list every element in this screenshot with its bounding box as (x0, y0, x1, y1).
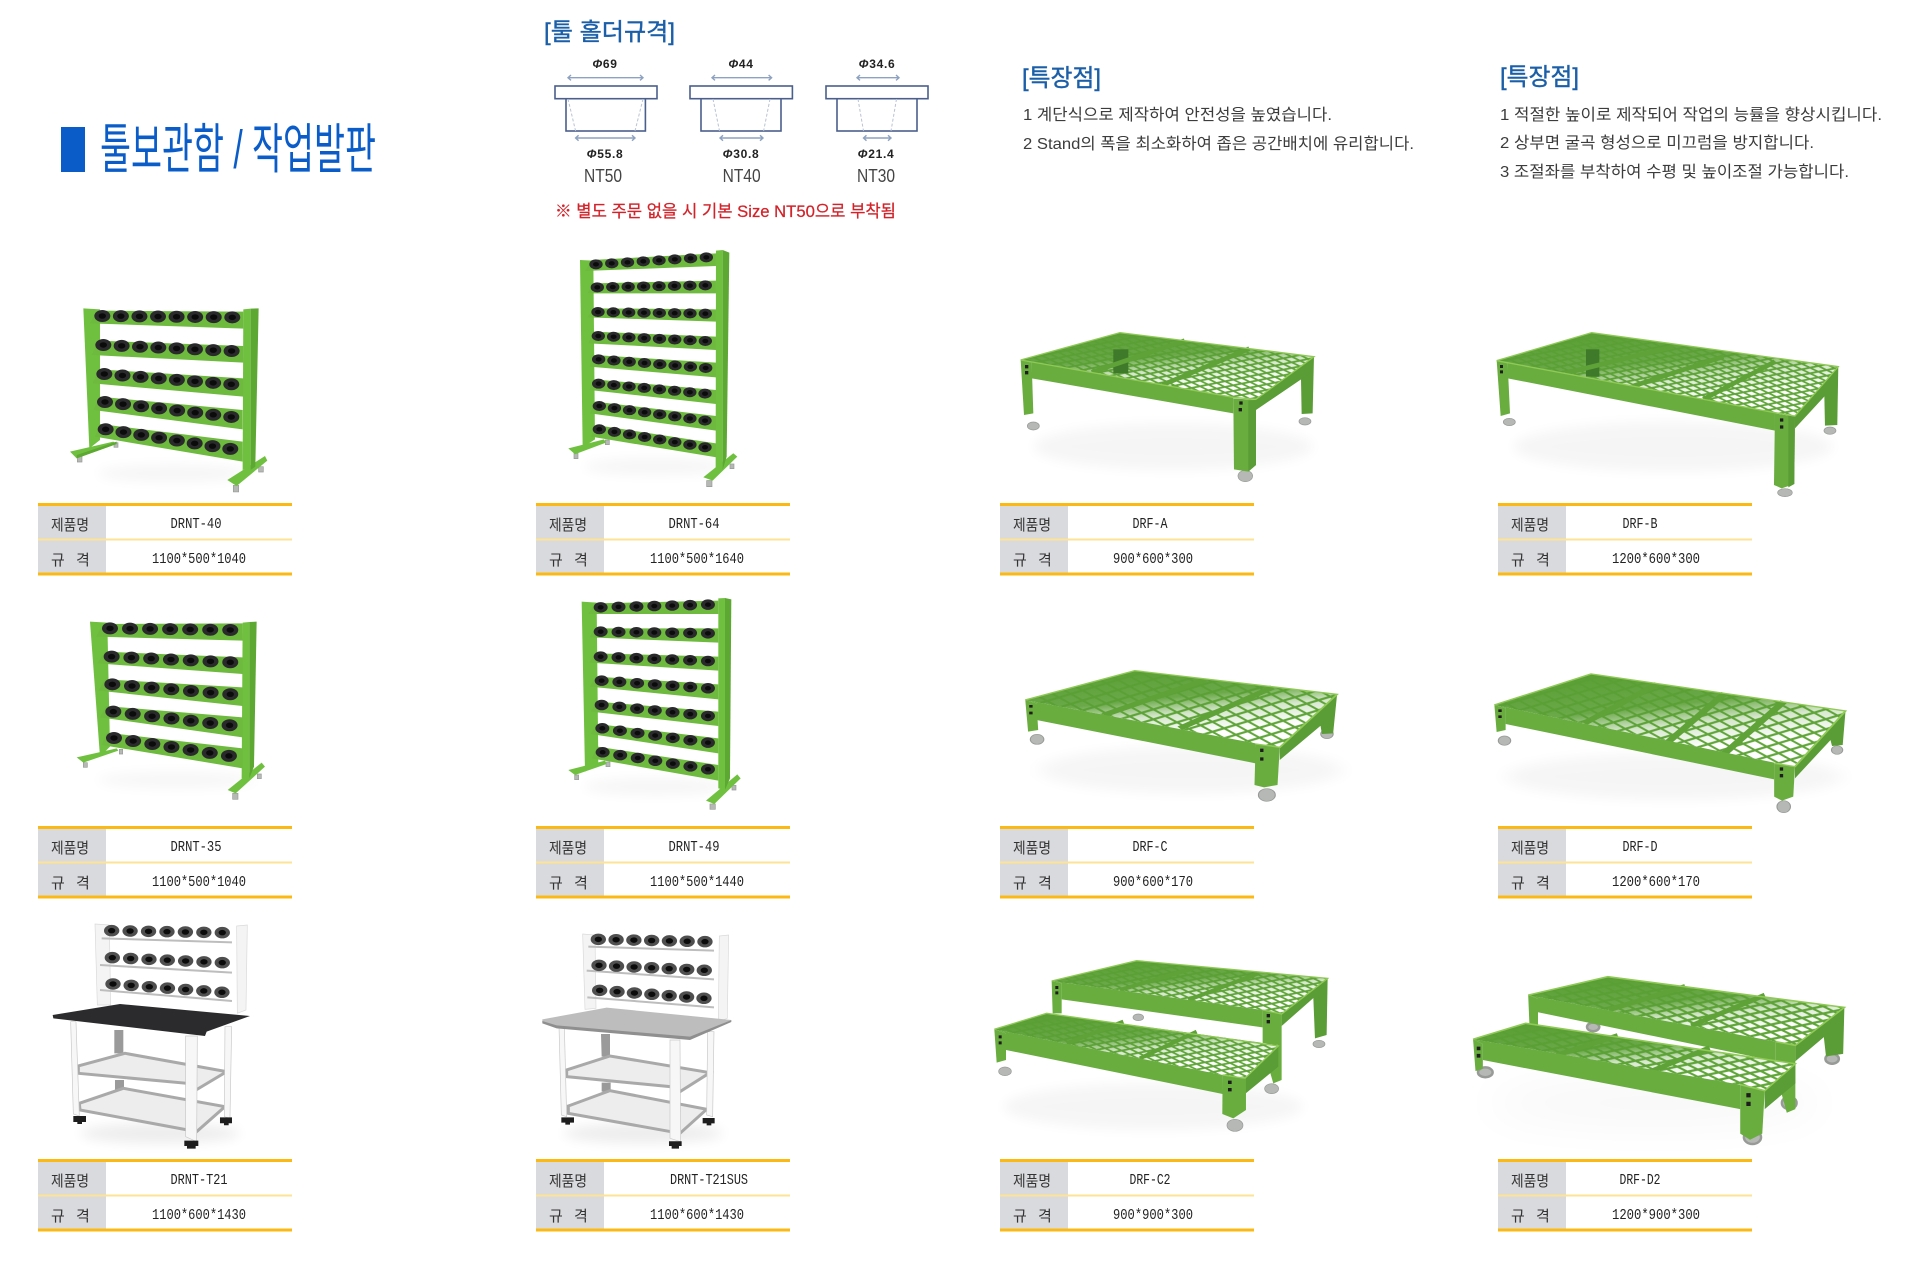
product: DRF-A platform (1021, 333, 1314, 482)
product: DRF-D2 two-step platform (1473, 977, 1844, 1144)
product: DRF-C platform (1025, 671, 1343, 801)
heading: features: [특장점] (1500, 64, 1579, 91)
spec table: DRF-C2: DRF-C2 (1130, 1173, 1170, 1189)
spec table: DRF-D2: 1200*900*300 (1612, 1208, 1700, 1224)
spec table: DRNT-T21SUS (536, 1159, 790, 1232)
spec table: DRF-D2: DRF-D2 (1620, 1173, 1660, 1189)
spec table: DRNT-49 (536, 826, 790, 898)
heading: features: [특장점] (1022, 65, 1101, 92)
spec table: DRNT-49: 제품명 (549, 840, 587, 857)
spec table: DRNT-40: 제품명 (51, 517, 89, 534)
spec table: DRNT-40: DRNT-40 (170, 517, 222, 533)
spec table: DRNT-T21: 격 (76, 1208, 90, 1225)
note: default size: ※ 별도 주문 없을 시 기본 Size NT50으로 부착됨 (555, 202, 896, 221)
spec table: DRNT-49: 격 (574, 875, 588, 892)
spec table: DRNT-64: 격 (574, 552, 588, 569)
spec table: DRF-C2 (1000, 1159, 1254, 1232)
diagram: NT30: NT30 (857, 166, 895, 186)
spec table: DRNT-T21SUS: 격 (574, 1208, 588, 1225)
diagram: NT40 (690, 57, 792, 186)
spec table: DRF-C2: 제품명 (1013, 1173, 1051, 1190)
spec table: DRF-D: 격 (1536, 875, 1550, 892)
feature list (1500, 106, 1882, 181)
diagram: NT30 (826, 57, 928, 186)
spec table: DRF-C: DRF-C (1132, 840, 1168, 856)
feature list: 1 계단식으로 제작하여 안전성을 높였습니다. (1023, 106, 1332, 124)
spec table: DRNT-35: 제품명 (51, 840, 89, 857)
feature list: 2 Stand의 폭을 최소화하여 좁은 공간배치에 유리합니다. (1023, 135, 1414, 153)
spec table: DRF-B: 1200*600*300 (1612, 552, 1700, 568)
spec table: DRF-B: 격 (1536, 552, 1550, 569)
product: DRNT-49 rack (568, 598, 741, 809)
diagram: NT40: Φ30.8 (723, 147, 759, 161)
spec table: DRNT-T21: 제품명 (51, 1173, 89, 1190)
panel: features right (1500, 64, 1882, 181)
spec table: DRF-A: 900*600*300 (1113, 552, 1193, 568)
spec table: DRF-A: 격 (1038, 552, 1052, 569)
spec table: DRF-C2: 900*900*300 (1113, 1208, 1193, 1224)
feature list: 2 상부면 굴곡 형성으로 미끄럼을 방지합니다. (1500, 134, 1814, 152)
spec table: DRNT-64: 규 (549, 552, 563, 569)
spec table: DRF-D: 제품명 (1511, 840, 1549, 857)
product: DRF-B platform (1497, 333, 1838, 497)
spec table: DRF-A (1000, 503, 1254, 576)
title (61, 120, 376, 180)
spec table: DRNT-35: DRNT-35 (170, 840, 222, 856)
diagram: NT50 (555, 57, 657, 186)
spec table: DRNT-35: 규 (51, 875, 65, 892)
product: DRF-D platform (1494, 674, 1846, 813)
spec table: DRNT-40: 규 (51, 552, 65, 569)
spec table: DRNT-35 (38, 826, 292, 898)
spec table: DRNT-T21SUS: DRNT-T21SUS (670, 1173, 748, 1189)
product: DRNT-64 rack (568, 250, 737, 487)
product: DRNT-35 rack (77, 622, 265, 799)
diagram: NT40: NT40 (723, 166, 761, 186)
feature list: 3 조절좌를 부착하여 수평 및 높이조절 가능합니다. (1500, 163, 1849, 181)
spec table: DRNT-35: 1100*500*1040 (152, 875, 246, 891)
spec table: DRNT-49: 규 (549, 875, 563, 892)
spec table: DRNT-49: 1100*500*1440 (650, 875, 744, 891)
spec table: DRNT-35: 격 (76, 875, 90, 892)
panel: features left (1022, 65, 1414, 153)
product: DRNT-T21SUS workbench (542, 934, 731, 1149)
icon: title square (61, 127, 85, 172)
spec table: DRF-D2: 제품명 (1511, 1173, 1549, 1190)
spec table: DRNT-T21SUS: 제품명 (549, 1173, 587, 1190)
heading: tool holder: [툴 홀더규격] (544, 19, 675, 46)
diagram: NT50: Φ55.8 (587, 147, 623, 161)
product: DRF-C2 two-step platform (994, 961, 1328, 1131)
spec table: DRF-C: 제품명 (1013, 840, 1051, 857)
diagram: NT50: Φ69 (592, 57, 618, 71)
spec table: DRF-B: 제품명 (1511, 517, 1549, 534)
spec table: DRF-A: 제품명 (1013, 517, 1051, 534)
spec table: DRF-B (1498, 503, 1752, 576)
spec table: DRNT-64: 1100*500*1640 (650, 552, 744, 568)
diagram: NT50: NT50 (584, 166, 622, 186)
feature list: 1 적절한 높이로 제작되어 작업의 능률을 향상시킵니다. (1500, 106, 1882, 124)
spec table: DRF-D2: 규 (1511, 1208, 1525, 1225)
spec table: DRNT-64: DRNT-64 (668, 517, 720, 533)
spec table: DRNT-T21: 규 (51, 1208, 65, 1225)
feature list (1023, 106, 1414, 153)
diagram: NT30: Φ21.4 (858, 147, 894, 161)
spec table: DRF-D2: 격 (1536, 1208, 1550, 1225)
spec table: DRNT-64 (536, 503, 790, 576)
spec table: DRF-D2 (1498, 1159, 1752, 1232)
product: DRNT-40 rack (70, 308, 267, 492)
spec table: DRNT-40: 격 (76, 552, 90, 569)
spec table: DRF-C (1000, 826, 1254, 898)
spec table: DRNT-49: DRNT-49 (668, 840, 720, 856)
spec table: DRNT-40: 1100*500*1040 (152, 552, 246, 568)
spec table: DRNT-T21: DRNT-T21 (170, 1173, 228, 1189)
spec table: DRF-D (1498, 826, 1752, 898)
spec table: DRF-B: DRF-B (1622, 517, 1658, 533)
diagram: NT30: Φ34.6 (859, 57, 895, 71)
spec table: DRF-C: 격 (1038, 875, 1052, 892)
spec table: DRF-D: 1200*600*170 (1612, 875, 1700, 891)
spec table: DRF-B: 규 (1511, 552, 1525, 569)
spec table: DRNT-64: 제품명 (549, 517, 587, 534)
spec table: DRNT-T21 (38, 1159, 292, 1232)
spec table: DRF-C: 규 (1013, 875, 1027, 892)
product: DRNT-T21 workbench (53, 924, 250, 1149)
spec table: DRF-D: DRF-D (1622, 840, 1658, 856)
panel: tool holder specification (544, 19, 928, 221)
spec table: DRF-A: 규 (1013, 552, 1027, 569)
spec table: DRNT-T21SUS: 규 (549, 1208, 563, 1225)
spec table: DRNT-T21: 1100*600*1430 (152, 1208, 246, 1224)
spec table: DRF-C: 900*600*170 (1113, 875, 1193, 891)
spec table: DRF-A: DRF-A (1132, 517, 1168, 533)
spec table: DRNT-40 (38, 503, 292, 576)
spec table: DRF-D: 규 (1511, 875, 1525, 892)
spec table: DRF-C2: 규 (1013, 1208, 1027, 1225)
spec table: DRNT-T21SUS: 1100*600*1430 (650, 1208, 744, 1224)
diagram: NT40: Φ44 (728, 57, 754, 71)
title text: 툴보관함 / 작업발판 (100, 120, 376, 180)
spec table: DRF-C2: 격 (1038, 1208, 1052, 1225)
